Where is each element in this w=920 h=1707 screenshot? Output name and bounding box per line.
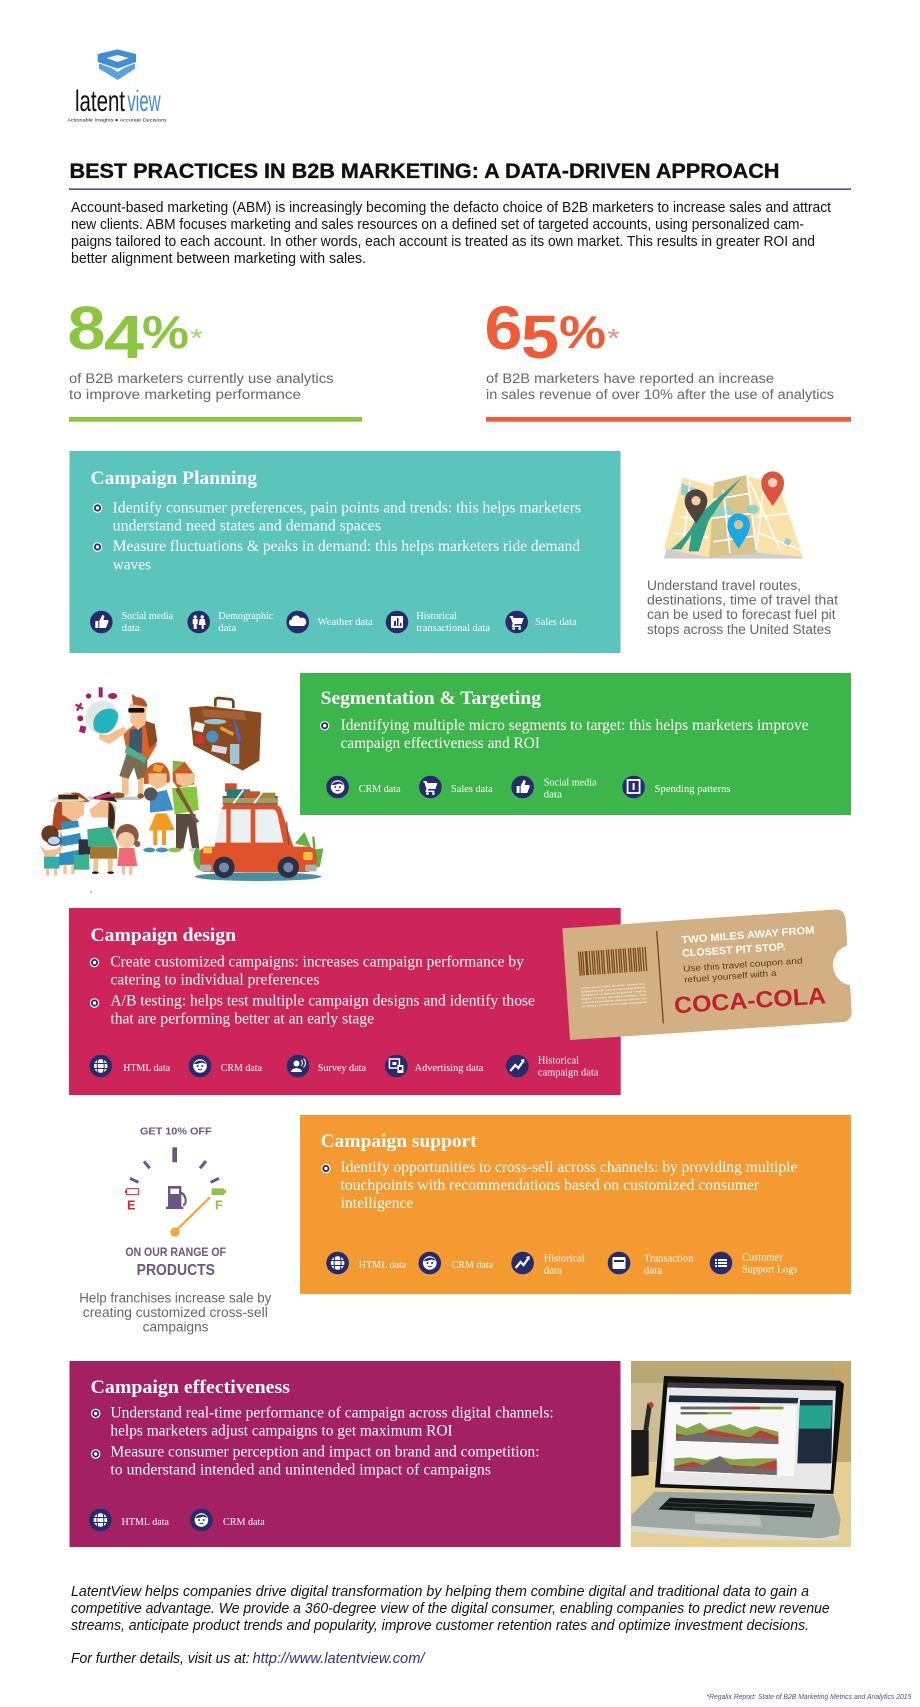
data source: HTML data: HTML data <box>359 1260 407 1271</box>
bullets: Identifying multiple micro segments to target: this helps marketers improve <box>341 717 809 734</box>
data source: sales data: Sales data <box>451 784 493 795</box>
data source: sales data: Sales data <box>535 617 577 628</box>
bullets <box>91 1404 554 1478</box>
data source: social media data: Social media <box>122 611 173 622</box>
coupon text: Use this travel coupon and <box>683 955 803 974</box>
fine print: ut aliquip ex ea commodo consequat <box>582 1001 648 1008</box>
bullets: Measure consumer perception and impact on brand and competition: <box>110 1444 540 1460</box>
heading: Campaign support <box>321 1131 477 1152</box>
screen <box>655 1376 844 1494</box>
data source: social media data <box>511 776 597 800</box>
data source: weather data <box>286 611 373 633</box>
data source: transaction data: data <box>644 1266 662 1276</box>
heading: Campaign design <box>90 925 236 946</box>
icon: empty battery and E <box>125 1189 139 1212</box>
data source: CRM data <box>190 1509 265 1531</box>
stat: 84%: * <box>190 323 203 353</box>
data source: transaction data <box>608 1252 694 1276</box>
fine print: nostrud exercitation ullamco laboris nisi <box>581 997 647 1005</box>
stat text: 84%: of B2B marketers currently use analytics <box>69 371 334 386</box>
data source: HTML data: HTML data <box>122 1517 169 1528</box>
icon: full battery and F: F <box>215 1198 223 1212</box>
car <box>193 783 323 881</box>
fine print: Lorem ipsum dolor sit amet, consectetur <box>580 982 646 990</box>
data source: historical campaign data <box>506 1055 599 1078</box>
bullets <box>90 954 535 1028</box>
needle <box>170 1197 210 1237</box>
data source: CRM data: CRM data <box>221 1063 262 1074</box>
data source: spending patterns <box>622 776 730 798</box>
data source: survey data: Survey data <box>318 1063 366 1074</box>
bullets: Measure fluctuations & peaks in demand: this helps marketers ride demand <box>113 538 580 555</box>
stat: 65%: % <box>559 306 606 358</box>
data source: social media data: Social media <box>544 778 597 788</box>
data source: CRM data: CRM data <box>359 784 401 795</box>
data source: historical data <box>511 1252 585 1276</box>
data source: historical transactional data: Historical <box>416 611 457 622</box>
data source: HTML data <box>89 1055 170 1077</box>
bullets: to understand intended and unintended impact of campaigns <box>110 1462 491 1478</box>
stat: 65% <box>484 294 620 371</box>
bullets: Understand real-time performance of campaign across digital channels: <box>110 1404 554 1422</box>
closing paragraph <box>71 1584 830 1634</box>
stat: 84%: 4 <box>104 303 144 371</box>
bullets: helps marketers adjust campaigns to get maximum ROI <box>110 1422 453 1440</box>
data source: sales data <box>419 776 493 798</box>
data source: demographic data <box>187 611 274 634</box>
website link <box>71 1651 426 1667</box>
bullets: campaign effectiveness and ROI <box>341 735 540 752</box>
bullets: that are performing better at an early stage <box>110 1010 374 1028</box>
data source: CRM data: CRM data <box>452 1260 494 1271</box>
stat: 84%: % <box>142 306 189 358</box>
gauge ticks <box>130 1147 219 1182</box>
heading: Segmentation & Targeting <box>321 688 542 709</box>
text: gauge caption: campaigns <box>143 1320 209 1334</box>
data source: customer support logs: Support Logs <box>742 1264 797 1276</box>
bullets <box>320 717 809 752</box>
girl with camera and boy <box>143 761 201 852</box>
logo: LatentView <box>67 49 167 123</box>
text: map caption: can be used to forecast fuel pit <box>647 607 836 622</box>
stat text: 65%: of B2B marketers have reported an increase <box>486 371 774 386</box>
intro paragraph: paigns tailored to each account. In other words, each account is treated as its own market. This results in greater ROI and <box>71 234 815 250</box>
icon: travel symbols <box>73 687 117 733</box>
data source: historical data: Historical <box>544 1254 585 1264</box>
data source: HTML data <box>326 1252 407 1274</box>
bullets: catering to individual preferences <box>110 972 319 988</box>
title: BEST PRACTICES IN B2B MARKETING: A DATA-DRIVEN APPROACH <box>70 160 780 183</box>
bullets: intelligence <box>341 1195 414 1212</box>
text: map caption: stops across the United States <box>647 622 831 637</box>
data source: CRM data <box>189 1055 262 1077</box>
data source: social media data <box>90 611 173 634</box>
website link: http://www.latentview.com/ <box>252 1651 426 1667</box>
bullets <box>321 1159 798 1212</box>
text: map caption <box>647 578 838 637</box>
data source: CRM data <box>326 776 401 798</box>
data source: historical campaign data: Historical <box>538 1056 579 1066</box>
data source: sales data <box>505 611 577 633</box>
bullets: Identify consumer preferences, pain points and trends: this helps marketers <box>113 500 581 516</box>
data source: customer support logs: Customer <box>742 1252 783 1264</box>
closing paragraph: streams, anticipate product trends and popularity, improve customer retention rates and optimize investment decisions. <box>71 1618 809 1634</box>
stat text: 65% <box>486 371 834 402</box>
bullets: A/B testing: helps test multiple campaign designs and identify those <box>110 992 535 1010</box>
text: gauge caption: Help franchises increase sale by <box>79 1290 272 1306</box>
text: gauge caption <box>79 1290 272 1334</box>
closing paragraph: competitive advantage. We provide a 360-degree view of the digital consumer, enabling companies to predict new revenue <box>71 1601 830 1617</box>
data source: CRM data <box>418 1252 494 1274</box>
fine print: incididunt ut labore et dolore magna <box>581 990 647 997</box>
website link: For further details, visit us at: <box>71 1651 250 1667</box>
text: map caption: Understand travel routes, <box>647 578 801 593</box>
illustration: fuel gauge offer: ON OUR RANGE OF <box>125 1245 226 1259</box>
logo: LatentView: view <box>127 85 161 118</box>
stat: 84%: 8 <box>68 294 106 362</box>
illustration: map with pins <box>664 471 803 559</box>
data source: historical transactional data: transactional data <box>416 623 490 634</box>
coupon text: CLOSEST PIT STOP. <box>682 942 786 960</box>
coupon text <box>673 925 827 1018</box>
stat text: 84% <box>69 371 334 402</box>
data source: advertising data <box>385 1055 484 1077</box>
pen pot <box>631 1430 649 1477</box>
bullets: waves <box>113 556 151 574</box>
bullets <box>93 500 581 574</box>
data source: HTML data <box>89 1509 169 1531</box>
illustration: fuel gauge offer <box>125 1127 226 1279</box>
data source: demographic data: Demographic <box>218 611 274 622</box>
photo: laptop dashboard <box>631 1361 851 1547</box>
laptop base <box>631 1492 841 1538</box>
bullets: understand need states and demand spaces <box>113 518 381 534</box>
heading: Campaign Planning <box>90 468 258 489</box>
closing paragraph: LatentView helps companies drive digital transformation by helping them combine digital and traditional data to gain a <box>71 1584 809 1600</box>
heading: Campaign effectiveness <box>90 1377 290 1398</box>
intro paragraph: Account-based marketing (ABM) is increasingly becoming the defacto choice of B2B marketers to increase sales and attract <box>71 200 831 216</box>
suitcase <box>189 698 261 771</box>
family <box>39 791 140 875</box>
logo: LatentView: latent <box>75 85 125 118</box>
illustration: travel coupon <box>562 909 852 1040</box>
data source: historical campaign data: campaign data <box>538 1068 599 1078</box>
stat: 65%: 5 <box>521 303 559 371</box>
fine print: aliqua. Ut enim ad minim veniam, quis <box>581 993 648 1001</box>
illustration: fuel gauge offer: GET 10% OFF <box>140 1127 212 1138</box>
bullets: Identify opportunities to cross-sell across channels: by providing multiple <box>341 1159 798 1176</box>
barcode <box>579 947 647 976</box>
icon: fuel pump <box>166 1186 187 1209</box>
coupon text: TWO MILES AWAY FROM <box>681 925 815 946</box>
coupon text: refuel yourself with a <box>684 968 777 985</box>
data source: weather data: Weather data <box>318 617 373 628</box>
data source: advertising data: Advertising data <box>415 1063 484 1074</box>
globe <box>85 701 119 734</box>
panel: campaign planning <box>70 451 620 653</box>
stat: 65%: 6 <box>484 294 522 362</box>
data source: survey data <box>287 1055 366 1077</box>
intro paragraph: better alignment between marketing with sales. <box>71 251 366 267</box>
text: map caption: destinations, time of travel that <box>647 592 838 608</box>
bullets: touchpoints with recommendations based on customized consumer <box>341 1177 760 1194</box>
bullets: Create customized campaigns: increases campaign performance by <box>110 954 524 970</box>
panel: campaign support <box>300 1115 851 1294</box>
stat text: 84%: to improve marketing performance <box>69 387 301 402</box>
icon: full battery and F <box>212 1188 226 1212</box>
illustration: fuel gauge offer: PRODUCTS <box>137 1262 215 1279</box>
data source: social media data: data <box>122 623 140 634</box>
data source: historical data: data <box>544 1266 562 1276</box>
data source: customer support logs <box>710 1252 797 1276</box>
stat: 65%: * <box>607 323 620 353</box>
intro paragraph: new clients. ABM focuses marketing and sales resources on a defined set of targeted accounts, using personalized cam- <box>71 217 804 233</box>
data source: transaction data: Transaction <box>644 1254 694 1264</box>
text: gauge caption: creating customized cross-sell <box>83 1305 268 1320</box>
data source: HTML data: HTML data <box>123 1063 170 1074</box>
man with sunglasses <box>87 694 157 800</box>
stat text: 65%: in sales revenue of over 10% after the use of analytics <box>486 387 834 402</box>
fine print: adipiscing elit, sed do eiusmod tempor <box>580 986 646 994</box>
illustration: travellers, suitcase and car <box>39 687 323 881</box>
stat: 84% <box>68 294 203 371</box>
panel: campaign design <box>69 908 621 1095</box>
fine print <box>580 982 648 1008</box>
logo: LatentView: Actionable Insights ● Accurate Decisions <box>67 117 167 123</box>
intro paragraph <box>71 200 831 267</box>
data source: social media data: data <box>544 790 562 800</box>
panel: segmentation and targeting <box>300 673 851 815</box>
coupon text: COCA-COLA <box>673 982 827 1018</box>
data source: historical transactional data <box>386 611 490 634</box>
data source: demographic data: data <box>218 623 237 634</box>
data source: CRM data: CRM data <box>223 1517 265 1528</box>
icon: empty battery and E: E <box>127 1198 135 1212</box>
data source: spending patterns: Spending patterns <box>655 784 730 795</box>
panel: campaign effectiveness <box>70 1361 620 1547</box>
